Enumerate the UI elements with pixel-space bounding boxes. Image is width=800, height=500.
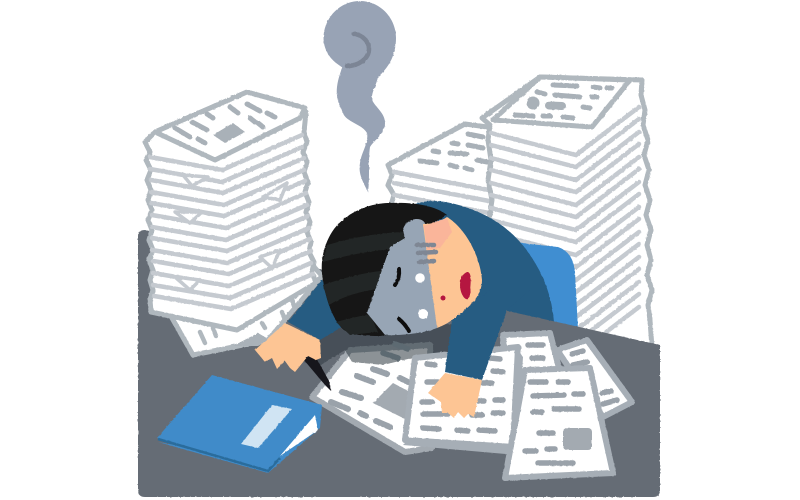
left front paper xyxy=(312,345,432,452)
top sheet: right stack xyxy=(493,77,630,127)
top sheet: left stack xyxy=(155,92,305,160)
forehead gloom lines xyxy=(417,245,436,262)
paper stack: left xyxy=(145,92,316,330)
nose mark xyxy=(440,296,446,300)
forehead flush xyxy=(424,218,452,250)
folder pages xyxy=(280,415,318,456)
right rear paper xyxy=(557,340,632,417)
right hand xyxy=(428,373,482,418)
left sleeve xyxy=(288,280,345,340)
desk xyxy=(138,230,660,497)
eye highlights xyxy=(415,273,428,319)
paper stack: right xyxy=(482,77,652,355)
worker's back xyxy=(415,201,554,345)
smoke of exhaustion xyxy=(324,1,396,192)
skin side of face xyxy=(423,217,482,328)
paper under left stack xyxy=(172,268,322,355)
blue folder xyxy=(157,375,322,473)
open mouth xyxy=(460,272,471,299)
closed eye lower xyxy=(399,319,409,331)
hair xyxy=(322,203,447,336)
hair shine stripes xyxy=(323,232,408,335)
folder label xyxy=(241,405,292,448)
pen xyxy=(304,352,331,391)
head shadow on desk and papers xyxy=(300,320,470,368)
paper stack: middle xyxy=(388,124,495,237)
folder cover xyxy=(157,375,322,470)
right sleeve xyxy=(445,290,530,380)
closed eye upper xyxy=(395,269,399,285)
centre paper xyxy=(403,347,523,455)
office chair xyxy=(520,243,578,330)
gloomy face side xyxy=(367,219,437,335)
front right paper xyxy=(505,368,613,478)
left hand xyxy=(255,323,321,372)
rear paper xyxy=(503,333,560,372)
